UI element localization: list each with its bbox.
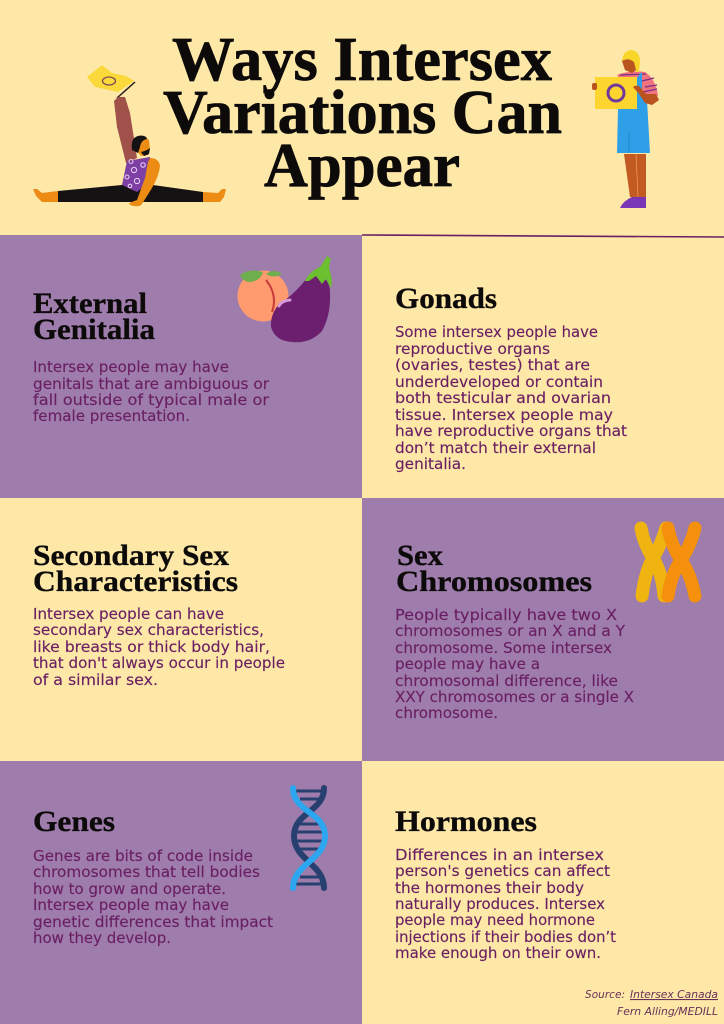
heading: sex chromosomes: Sex (397, 539, 443, 572)
panel: external genitalia (0, 235, 362, 498)
text: gonads body: Some intersex people have (395, 323, 598, 341)
icon: peach and eggplant (238, 256, 332, 342)
heading: external genitalia: Genitalia (33, 313, 155, 346)
heading: gonads: Gonads (395, 282, 497, 315)
heading: secondary sex characteristics: Characteristics (33, 565, 238, 598)
text: secondary sex characteristics body: that don't always occur in people (33, 654, 285, 672)
heading: genes: Genes (33, 805, 115, 838)
text: gonads body: reproductive organs (395, 340, 550, 358)
text: secondary sex characteristics body: of a similar sex. (33, 671, 158, 689)
text: sex chromosomes body (395, 606, 634, 722)
text: external genitalia body: Intersex people may have (33, 358, 229, 376)
text: gonads body (395, 323, 627, 473)
illustration: seated person with intersex flag (33, 65, 226, 206)
text: external genitalia body: genitals that are ambiguous or (33, 375, 270, 393)
text: secondary sex characteristics body: like breasts or thick body hair, (33, 638, 270, 656)
text: external genitalia body (33, 358, 270, 425)
panel: genes (0, 761, 362, 1024)
icon: DNA helix (293, 788, 325, 888)
text: genes body: how they develop. (33, 929, 171, 947)
heading: secondary sex characteristics (33, 539, 238, 598)
heading: external genitalia: External (33, 287, 147, 320)
text: hormones body: injections if their bodies don’t (395, 928, 616, 946)
panel: sex chromosomes (362, 498, 724, 761)
heading: hormones: Hormones (395, 805, 537, 838)
icon: chromosomes (641, 528, 695, 596)
text: hormones body: naturally produces. Intersex (395, 895, 605, 913)
text: sex chromosomes body: People typically have two X (395, 606, 617, 624)
text: gonads body: both testicular and ovarian (395, 389, 611, 407)
panel: secondary sex characteristics (0, 498, 362, 761)
text: sex chromosomes body: chromosome. Some intersex (395, 639, 612, 657)
illustration: standing person with intersex sign (592, 50, 659, 208)
text: genes body: Genes are bits of code inside (33, 847, 253, 865)
text: secondary sex characteristics body: secondary sex characteristics, (33, 621, 264, 639)
source credit (585, 988, 718, 1018)
heading: secondary sex characteristics: Secondary Sex (33, 539, 229, 572)
text: sex chromosomes body: chromosomal difference, like (395, 672, 618, 690)
text: gonads body: tissue. Intersex people may (395, 406, 613, 424)
text: sex chromosomes body: XXY chromosomes or a single X (395, 688, 634, 706)
text: sex chromosomes body: people may have a (395, 655, 540, 673)
text: secondary sex characteristics body: Intersex people can have (33, 605, 224, 623)
text: sex chromosomes body: chromosome. (395, 704, 498, 722)
text: sex chromosomes body: chromosomes or an X and a Y (395, 622, 626, 640)
text: gonads body: genitalia. (395, 455, 466, 473)
title (163, 26, 562, 200)
source credit: Source: (585, 988, 625, 1001)
text: secondary sex characteristics body (33, 605, 285, 689)
source credit: Fern Alling/MEDILL (617, 1005, 718, 1018)
text: hormones body: make enough on their own. (395, 944, 601, 962)
text: genes body (33, 847, 273, 947)
source credit: Intersex Canada (630, 988, 718, 1001)
text: genes body: chromosomes that tell bodies (33, 863, 260, 881)
panel: gonads (362, 235, 724, 498)
text: external genitalia body: female presentation. (33, 407, 190, 425)
title: Ways Intersex (172, 26, 552, 94)
text: gonads body: don’t match their external (395, 439, 596, 457)
text: gonads body: have reproductive organs that (395, 422, 627, 440)
panel: hormones (362, 761, 724, 1024)
heading: sex chromosomes (396, 539, 592, 598)
text: genes body: Intersex people may have (33, 896, 229, 914)
text: hormones body: the hormones their body (395, 879, 584, 897)
heading: external genitalia (33, 287, 155, 346)
title: Variations Can (163, 79, 562, 147)
text: hormones body: people may need hormone (395, 911, 595, 929)
heading: sex chromosomes: Chromosomes (396, 565, 592, 598)
text: genes body: how to grow and operate. (33, 880, 226, 898)
text: genes body: genetic differences that impact (33, 913, 273, 931)
text: hormones body (395, 846, 616, 962)
text: external genitalia body: fall outside of typical male or (33, 391, 270, 409)
text: hormones body: person's genetics can affect (395, 862, 610, 880)
title: Appear (264, 132, 460, 200)
text: gonads body: (ovaries, testes) that are (395, 356, 590, 374)
text: hormones body: Differences in an intersex (395, 846, 604, 864)
text: gonads body: underdeveloped or contain (395, 373, 603, 391)
